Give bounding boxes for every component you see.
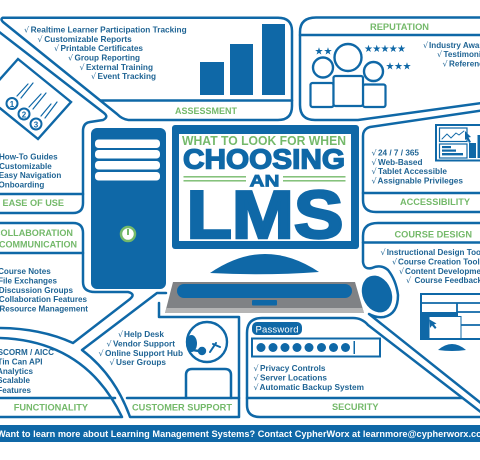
collaboration list: Collaboration Features <box>0 295 87 304</box>
accessibility list: √ <box>372 167 378 176</box>
accessibility list: 24 / 7 / 365 <box>378 148 419 158</box>
icon: numbered checklist <box>0 59 71 139</box>
reputation list <box>423 41 480 68</box>
functionality label: FUNCTIONALITY <box>14 402 89 414</box>
collaboration label <box>0 228 77 250</box>
accessibility list: √ <box>372 176 378 186</box>
course design list: √ <box>399 267 405 276</box>
title line: an: AN <box>250 172 280 191</box>
security label: SECURITY <box>332 402 379 413</box>
footer banner: Want to learn more about Learning Management Systems? Contact CypherWorx at learnmore@cypherworx.com <box>0 429 480 439</box>
monitor with title <box>172 125 359 253</box>
icon: power button <box>121 227 135 241</box>
panel: course design <box>363 223 480 404</box>
reputation list: √ <box>423 41 429 50</box>
collaboration list: Resource Management <box>0 304 88 314</box>
reputation list: √ <box>442 60 448 68</box>
assessment checklist: √ <box>68 54 74 62</box>
icon: analytics dashboard <box>436 125 480 160</box>
customer support list: √ <box>110 358 116 367</box>
assessment checklist: Realtime Learner Participation Tracking <box>31 26 187 34</box>
security list <box>254 364 364 392</box>
icon: numbered checklist: 2 <box>22 110 27 120</box>
security list: √ <box>254 383 260 392</box>
security list: Automatic Backup System <box>260 383 364 392</box>
security list: Privacy Controls <box>260 364 326 373</box>
accessibility list: Web-Based <box>378 158 423 167</box>
icon: numbered checklist: 3 <box>34 120 39 130</box>
assessment checklist: Printable Certificates <box>60 44 144 53</box>
collaboration label: COMMUNICATION <box>0 240 77 250</box>
accessibility list: √ <box>372 148 378 158</box>
icon: bar chart <box>200 24 285 95</box>
course design list <box>380 248 480 285</box>
monitor stand <box>210 254 319 274</box>
accessibility list: √ <box>372 158 378 167</box>
panel: assessment <box>2 18 292 120</box>
icon: rated people: ★★ <box>314 46 332 58</box>
panel: accessibility <box>363 110 480 212</box>
customer support label: CUSTOMER SUPPORT <box>132 402 232 414</box>
course design list: √ <box>380 248 386 257</box>
title rules <box>184 177 346 181</box>
customer support list: √ <box>98 349 104 358</box>
icon: numbered checklist: 1 <box>10 100 15 109</box>
panel: reputation <box>300 18 480 120</box>
panel: ease of use <box>0 31 106 213</box>
ease of use label: EASE OF USE <box>2 198 64 209</box>
icon: rated people <box>310 44 412 107</box>
assessment checklist <box>24 26 187 81</box>
assessment checklist: Group Reporting <box>74 54 140 62</box>
accessibility list: Assignable Privileges <box>378 176 463 186</box>
customer support list: Help Desk <box>124 330 165 339</box>
customer support list: Vendor Support <box>113 340 175 348</box>
icon: rated people: ★★★ <box>386 62 412 72</box>
footer banner <box>0 425 480 442</box>
assessment checklist: External Training <box>86 63 153 72</box>
customer support list: User Groups <box>116 358 167 367</box>
accessibility label: ACCESSIBILITY <box>400 197 471 208</box>
ease of use list: Easy Navigation <box>0 171 61 180</box>
assessment checklist: √ <box>91 72 97 81</box>
course design label: COURSE DESIGN <box>394 230 472 240</box>
keyboard <box>165 282 364 313</box>
customer support list: √ <box>106 340 112 348</box>
reputation label: REPUTATION <box>370 22 429 33</box>
reputation list: √ <box>437 50 443 59</box>
panel: customer support <box>82 293 239 417</box>
security list: √ <box>254 374 260 382</box>
collaboration list: Discussion Groups <box>0 286 73 295</box>
panel: security <box>247 318 480 417</box>
course design list: √ <box>406 276 412 285</box>
mouse <box>356 271 398 317</box>
password badge: Password <box>256 324 298 336</box>
icon: computer tower <box>91 128 166 289</box>
customer support list: √ <box>118 330 124 339</box>
course design list: Course Feedback <box>414 276 480 285</box>
panel: functionality <box>0 338 122 417</box>
title line: what to look for when: WHAT TO LOOK FOR WHEN <box>182 134 346 148</box>
icon: support agent headset <box>186 322 231 398</box>
security list: √ <box>254 364 260 373</box>
assessment checklist: √ <box>54 44 60 53</box>
assessment checklist: Event Tracking <box>98 72 156 81</box>
title line: choosing: CHOOSING <box>183 143 345 174</box>
icon: course authoring screen <box>421 294 480 351</box>
ease of use list: Customizable <box>0 162 52 171</box>
assessment checklist: √ <box>24 26 30 34</box>
customer support list <box>98 330 183 367</box>
icon: rated people: ★★★★★ <box>364 44 406 55</box>
functionality list <box>0 348 54 395</box>
assessment checklist: √ <box>80 63 86 72</box>
accessibility list: Tablet Accessible <box>378 167 448 176</box>
accessibility list <box>372 148 463 186</box>
ease of use list: How-To Guides <box>0 152 58 162</box>
panel: collaboration and communication <box>0 223 133 343</box>
password field <box>252 338 380 356</box>
title line: lms: LMS <box>186 177 344 253</box>
security list: Server Locations <box>260 374 327 382</box>
assessment label: ASSESSMENT <box>175 106 237 117</box>
course design list: √ <box>392 258 398 266</box>
customer support list: Online Support Hub <box>105 349 183 358</box>
ease of use list <box>0 152 61 190</box>
collaboration list <box>0 267 88 314</box>
assessment checklist: Customizable Reports <box>44 35 132 44</box>
assessment checklist: √ <box>38 35 44 44</box>
